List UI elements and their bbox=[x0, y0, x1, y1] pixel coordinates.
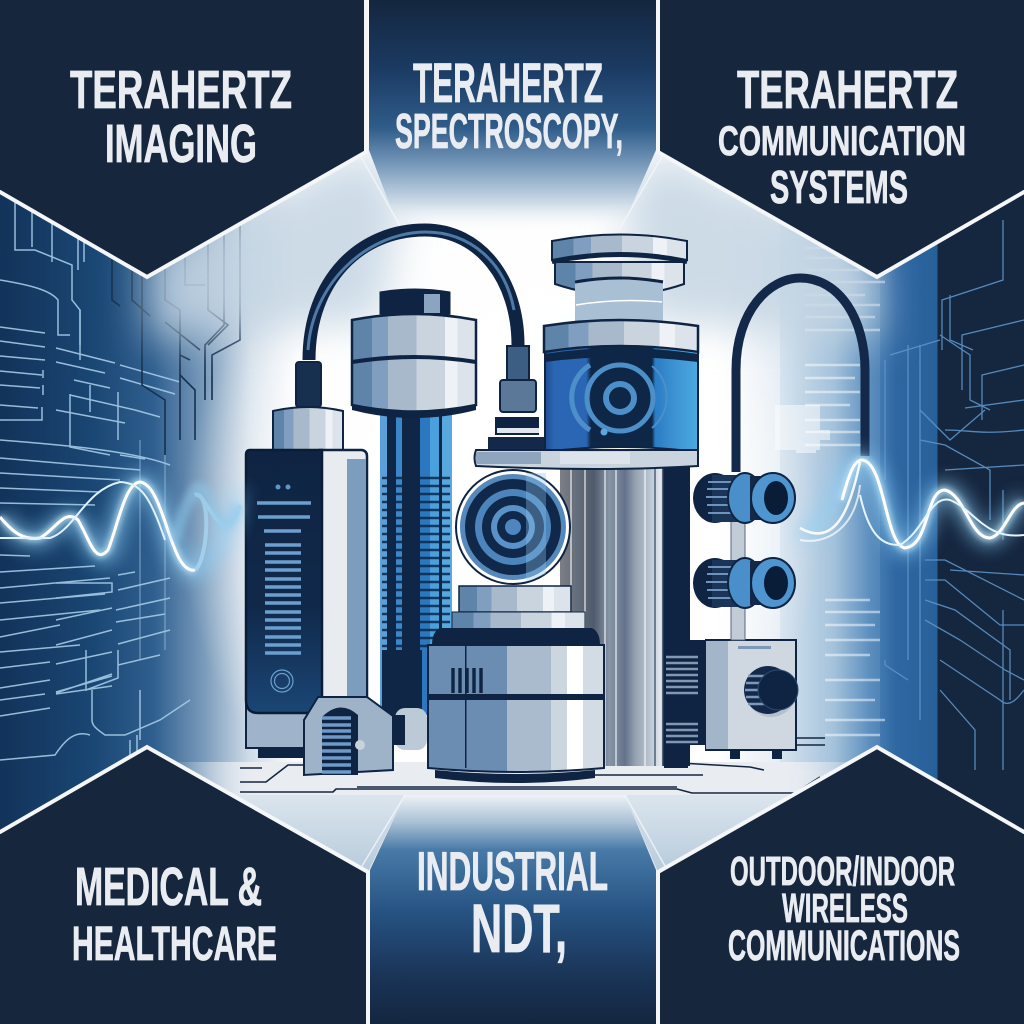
light ray edges bbox=[360, 155, 665, 866]
panel: medical and healthcare bbox=[0, 747, 368, 1024]
heading: terahertz imaging: IMAGING bbox=[105, 114, 257, 174]
tower connector bbox=[296, 362, 321, 407]
heading: terahertz communication systems: SYSTEMS bbox=[770, 161, 908, 213]
heading: terahertz spectroscopy bbox=[395, 51, 623, 159]
tower side panel bbox=[320, 450, 367, 748]
soft upper haze bbox=[147, 150, 880, 340]
drum dark top bbox=[432, 628, 600, 645]
device: right cable bbox=[736, 278, 865, 472]
head top disc bbox=[552, 234, 687, 260]
heading: medical and healthcare: HEALTHCARE bbox=[72, 918, 277, 971]
wave: left bbox=[0, 482, 240, 570]
device: coupler pole bbox=[731, 520, 745, 640]
drum foot bbox=[435, 770, 595, 783]
panel: top center bbox=[369, 0, 656, 232]
wave: right bbox=[800, 460, 1024, 548]
device: left server tower bbox=[246, 362, 367, 758]
head second disc bbox=[555, 262, 684, 295]
device: upper coupler bbox=[693, 473, 795, 523]
heading: terahertz spectroscopy: TERAHERTZ bbox=[413, 51, 603, 114]
glass target bbox=[572, 365, 667, 431]
device: head unit bbox=[474, 234, 698, 469]
heading: outdoor indoor wireless communications: WIRELESS bbox=[782, 885, 908, 931]
tower face bbox=[246, 450, 322, 713]
device: pedestal and drum bbox=[428, 586, 604, 783]
device: right connector stack bbox=[488, 346, 548, 451]
drum body bbox=[428, 645, 604, 772]
circuit traces right bbox=[885, 220, 1024, 770]
panel: bottom center bbox=[370, 795, 656, 1024]
grille bbox=[666, 657, 698, 742]
device: grey column bbox=[560, 466, 690, 768]
floor bbox=[170, 738, 870, 872]
drum vents bbox=[453, 668, 481, 693]
heading: industrial ndt: NDT, bbox=[471, 890, 567, 967]
status dots bbox=[276, 484, 290, 490]
tube ribs bbox=[382, 478, 450, 646]
head shoulder bbox=[544, 320, 698, 352]
heading: terahertz imaging bbox=[70, 60, 292, 174]
heading: terahertz spectroscopy: SPECTROSCOPY, bbox=[395, 105, 623, 159]
device: right lower box bbox=[664, 640, 798, 759]
panel: terahertz imaging bbox=[0, 0, 366, 277]
head glass bbox=[545, 346, 698, 452]
data grids right bbox=[805, 248, 885, 735]
heading: medical and healthcare: MEDICAL & bbox=[75, 857, 262, 917]
vent bars bbox=[257, 503, 311, 653]
heading: medical and healthcare bbox=[72, 857, 277, 971]
device: lens target bbox=[456, 470, 570, 584]
device: small front unit bbox=[304, 697, 427, 775]
device: lower coupler bbox=[693, 558, 795, 608]
box bbox=[706, 640, 796, 750]
power button bbox=[271, 670, 293, 692]
light blocks right bbox=[775, 405, 830, 453]
circuit traces left bbox=[0, 195, 190, 770]
circuit traces dark upper bbox=[112, 220, 240, 455]
ray wedge: bottom left bbox=[147, 747, 405, 872]
head neck bbox=[575, 280, 663, 322]
ray wedge: bottom right bbox=[625, 747, 877, 872]
heading: industrial ndt: INDUSTRIAL bbox=[417, 840, 608, 902]
heading: outdoor indoor wireless communications bbox=[728, 848, 960, 970]
knob bbox=[746, 667, 796, 717]
heading: terahertz communication systems bbox=[718, 60, 966, 213]
panel: outdoor indoor wireless communications bbox=[658, 747, 1024, 1024]
heading: terahertz imaging: TERAHERTZ bbox=[70, 60, 292, 120]
device: tube drum bbox=[352, 289, 476, 418]
head plate bbox=[474, 450, 698, 469]
device: tube column bbox=[380, 405, 452, 715]
device: main cable bbox=[308, 230, 518, 360]
panel: terahertz communication systems bbox=[658, 0, 1024, 277]
heading: industrial ndt bbox=[417, 840, 608, 967]
tower base bbox=[246, 700, 346, 748]
tower collar bbox=[273, 407, 343, 450]
